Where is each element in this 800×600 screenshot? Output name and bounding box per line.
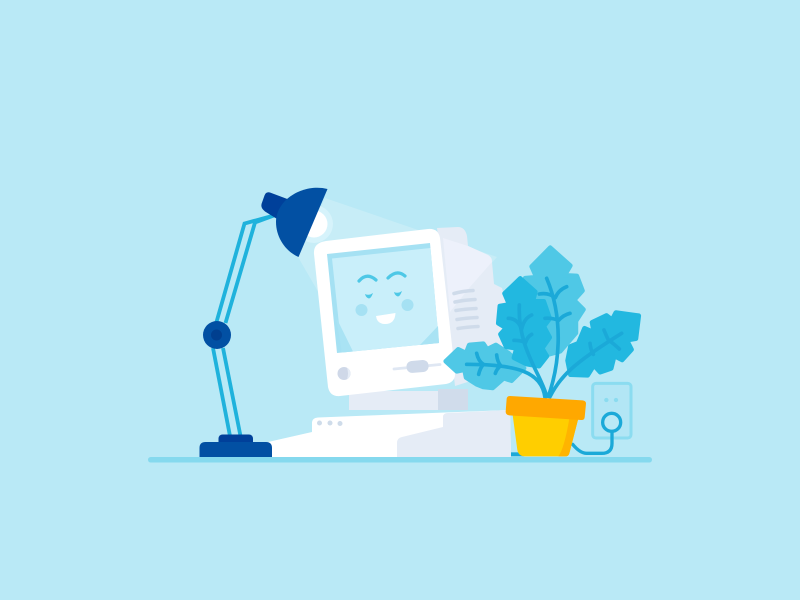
smile: [376, 313, 396, 324]
power cord: [511, 413, 621, 456]
face: [356, 273, 414, 324]
vent lines: [454, 290, 478, 328]
base side panel: [397, 410, 511, 457]
lamp base: [200, 434, 272, 457]
disk slot: [394, 360, 440, 373]
power button: [338, 367, 350, 380]
power outlet: [593, 383, 631, 438]
front left leaf: [498, 278, 550, 366]
pot body: [513, 415, 578, 456]
lamp shade: [276, 188, 328, 257]
stems and veins: [467, 278, 622, 398]
screen reflections: [336, 317, 439, 352]
computer stand: [349, 389, 468, 410]
desk lamp: [200, 188, 333, 457]
lamp bulb: [295, 205, 333, 243]
screen: [327, 243, 439, 353]
computer back housing: [437, 227, 510, 386]
pot shadow: [558, 418, 578, 456]
eyebrows: [359, 273, 405, 281]
flower pot: [506, 396, 586, 456]
left leaf: [446, 344, 524, 388]
desktop base: [268, 410, 511, 457]
back housing lit area: [443, 238, 492, 312]
lamp joint: [203, 321, 231, 349]
potted plant: [446, 248, 639, 398]
light beam: [298, 198, 497, 352]
lamp arm: [213, 216, 274, 436]
pot rim: [506, 396, 586, 420]
plug: [603, 413, 621, 431]
back leaf: [525, 248, 583, 356]
closed eyes: [365, 291, 402, 298]
screen inner: [332, 248, 439, 352]
cheeks: [356, 304, 368, 316]
base buttons: [317, 420, 342, 426]
desk surface: [148, 457, 652, 462]
right leaf: [568, 313, 639, 375]
cord stub behind pot: [511, 452, 524, 456]
computer monitor: [314, 229, 455, 396]
outlet holes: [604, 398, 618, 402]
lamp cap: [261, 192, 290, 222]
